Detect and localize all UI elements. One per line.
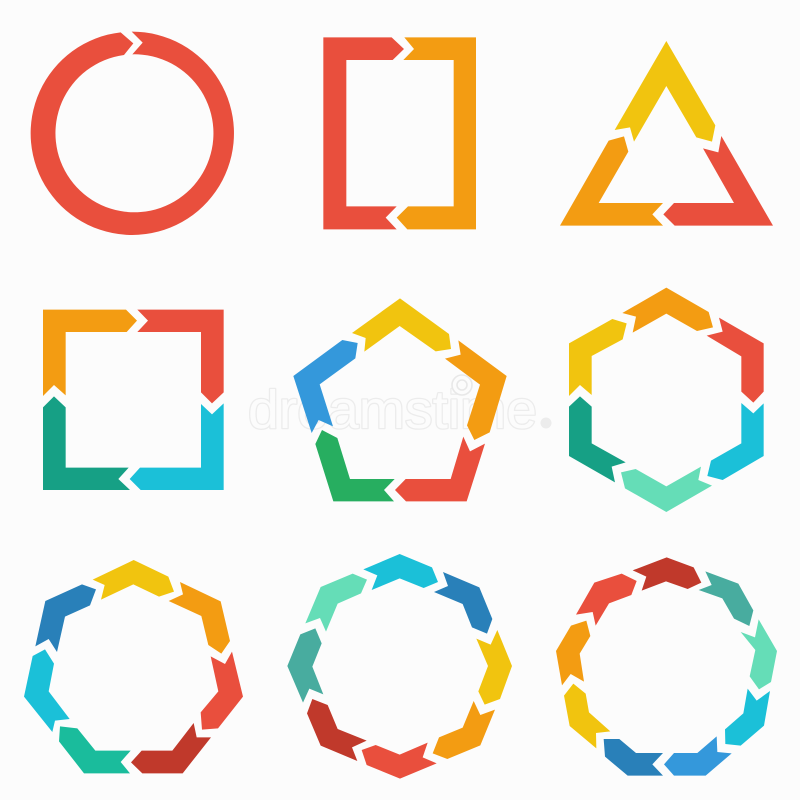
arrow blue [434, 572, 492, 634]
arrow mint [305, 574, 367, 632]
panel: hexagon cycle, 6 arrows [569, 288, 764, 512]
arrow mint [621, 467, 712, 512]
panel: heptagon cycle, 7 arrows [24, 560, 243, 773]
arrow red [576, 574, 637, 626]
arrow orange [43, 310, 137, 396]
arrow teal [43, 396, 130, 490]
arrow mint [741, 619, 777, 689]
arrow red [362, 743, 437, 779]
arrow cyan [725, 689, 770, 746]
panel: pentagon cycle, 5 arrows [293, 298, 507, 501]
arrow orange [169, 582, 230, 654]
panel: circle cycle, 1 arrow [31, 32, 234, 235]
arrow dark red [307, 699, 367, 761]
arrow red [137, 310, 224, 403]
arrow red [201, 652, 243, 730]
arrow blue [293, 340, 358, 433]
arrow dark blue [604, 739, 663, 776]
arrow orange [433, 701, 495, 759]
arrow cyan [363, 554, 438, 590]
arrow cyan [24, 649, 70, 732]
arrow red [663, 136, 773, 226]
arrow 1 red [323, 37, 404, 229]
arrow yellow [615, 41, 715, 142]
panel: rectangle cycle, 2 arrows [323, 37, 476, 229]
arrow blue [35, 584, 96, 652]
arrow cyan [130, 403, 224, 490]
arrow green teal [59, 726, 131, 773]
arrow yellow [93, 560, 174, 600]
arrow orange [556, 621, 590, 685]
arrow cyan [707, 403, 764, 480]
arrow orange [445, 340, 507, 440]
panel: triangle cycle, 3 arrows [560, 41, 773, 226]
arrow yellow [352, 298, 451, 352]
arrow orange [622, 288, 713, 333]
arrow 2 orange [397, 37, 476, 229]
arrow grey teal [699, 571, 753, 626]
panel: square cycle, 4 arrows [43, 310, 224, 490]
panel: nonagon cycle, 9 arrows [556, 557, 777, 776]
arrow orange [560, 136, 663, 226]
arrow green [315, 430, 395, 501]
arrow yellow [569, 319, 627, 396]
watermark: dreamstime [248, 380, 537, 440]
arrow dark red [131, 723, 211, 773]
panel: octagon cycle, 8 arrows [287, 554, 512, 779]
arrow red [395, 437, 485, 501]
arrow grey teal [287, 628, 323, 703]
arrow teal [569, 396, 626, 482]
arrow light blue [664, 736, 732, 776]
arrow yellow [564, 684, 610, 748]
arrow yellow [476, 630, 512, 705]
arrow red [707, 318, 764, 403]
arrow dark red [633, 557, 701, 591]
